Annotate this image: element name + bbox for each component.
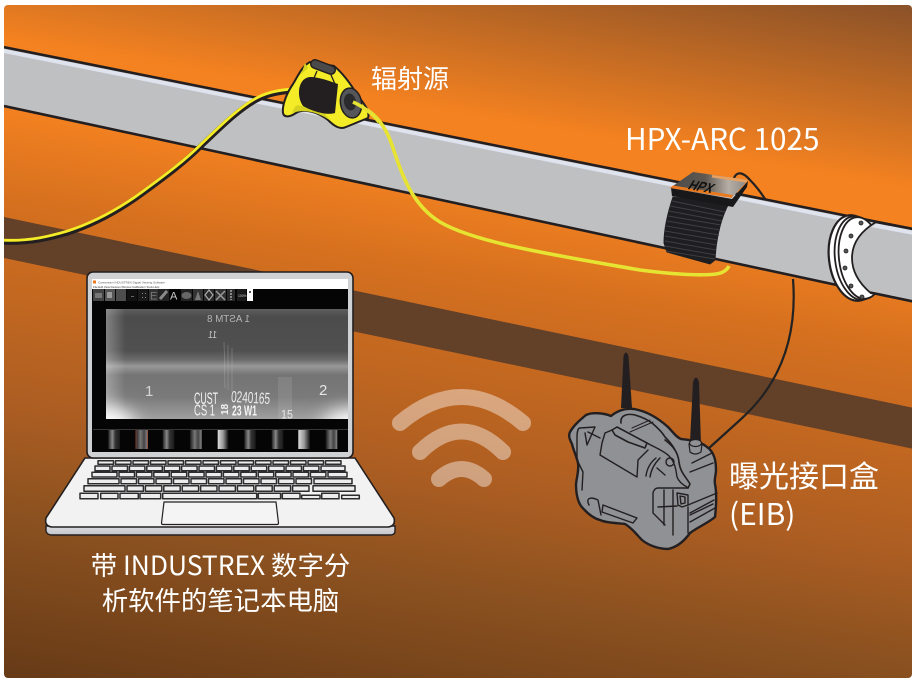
detector head bbox=[671, 181, 748, 207]
label: laptop with INDUSTREX software: 带 INDUSTREX 数字分 bbox=[91, 544, 350, 583]
keyboard bbox=[80, 461, 359, 499]
label: exposure interface box: (EIB) bbox=[729, 490, 795, 534]
trackpad bbox=[162, 502, 278, 524]
thumbnail strip bbox=[93, 429, 348, 449]
cable: HPX device to exposure interface box bbox=[708, 173, 794, 449]
radiograph image bbox=[106, 309, 348, 419]
HPX-ARC 1025 detector with wrap bbox=[664, 172, 748, 264]
screen bbox=[92, 279, 348, 452]
case body bbox=[569, 409, 716, 549]
laptop bbox=[46, 272, 395, 535]
app title and menu bar: File Edit View Devices Window Calibration Tools Help bbox=[93, 285, 160, 289]
label: laptop with INDUSTREX software bbox=[91, 544, 350, 618]
radiograph image: 0240165 bbox=[231, 389, 271, 408]
radiograph image: 1 bbox=[145, 383, 153, 400]
scene clipped to frame bbox=[4, 47, 914, 549]
case lines bbox=[577, 414, 717, 535]
toolbar icons: A bbox=[170, 290, 178, 302]
cable: yellow from source to HPX bbox=[353, 102, 729, 275]
wi-fi icon bbox=[400, 397, 523, 479]
radiograph image: 1 ASTM 8 bbox=[207, 314, 250, 325]
radiation source device bbox=[283, 62, 379, 128]
pipe bbox=[4, 47, 914, 302]
pipe flange with bolts bbox=[824, 212, 914, 304]
detector logo: HPX bbox=[685, 178, 718, 196]
exposure interface box bbox=[569, 352, 717, 549]
antennas bbox=[621, 352, 701, 444]
label: radiation source: 辐射源 bbox=[371, 59, 449, 96]
label: laptop with INDUSTREX software: 析软件的笔记本电脑 bbox=[102, 579, 339, 618]
screen bezel bbox=[87, 272, 353, 458]
app title and menu bar: Carestream INDUSTREX Digital Viewing Software bbox=[98, 280, 165, 284]
app title and menu bar bbox=[92, 279, 348, 289]
radiograph image: 18 bbox=[220, 403, 231, 415]
radiograph image: CUST bbox=[194, 389, 218, 408]
label: HPX-ARC 1025: HPX-ARC 1025 bbox=[625, 116, 819, 159]
radiograph image: 15 bbox=[281, 408, 293, 422]
label: exposure interface box bbox=[729, 452, 879, 534]
cable: black and yellow from the left bbox=[4, 89, 290, 242]
black wrap strap bbox=[664, 197, 729, 264]
antenna connector bbox=[689, 440, 702, 454]
toolbar icons: 100% bbox=[238, 294, 247, 298]
pipe shadow band bbox=[4, 217, 914, 449]
radiograph image: 2 bbox=[319, 382, 327, 399]
label: exposure interface box: 曝光接口盒 bbox=[729, 452, 879, 496]
radiograph image: 23 W1 bbox=[232, 402, 257, 420]
toolbar icons: E bbox=[150, 290, 157, 302]
toolbar icons bbox=[93, 289, 253, 301]
laptop base bbox=[46, 458, 395, 535]
radiograph image: CS 1 bbox=[194, 402, 215, 420]
radiograph image: 11 bbox=[208, 330, 217, 341]
